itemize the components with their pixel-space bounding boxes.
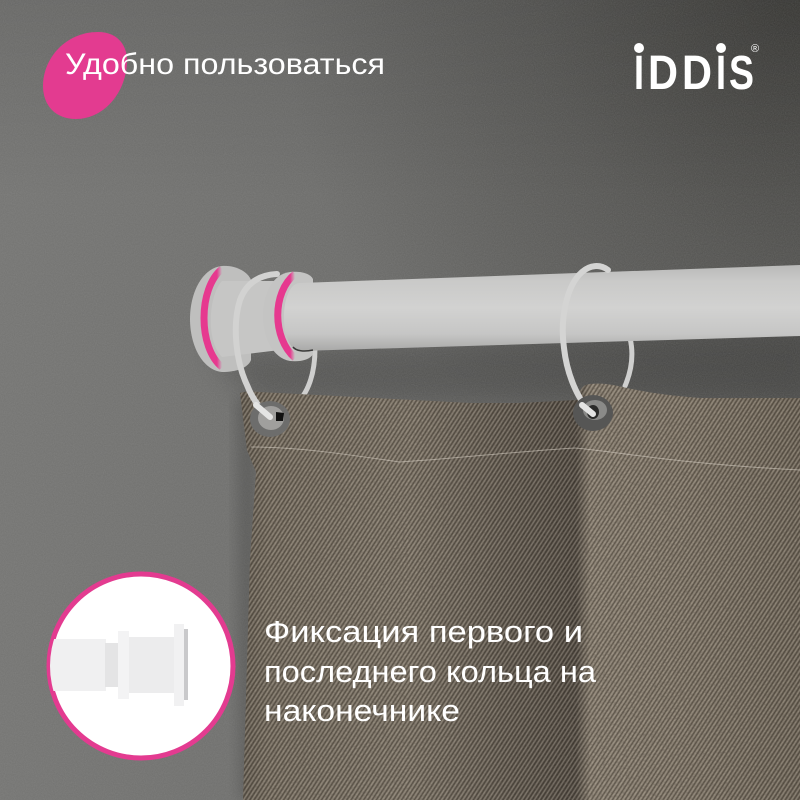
logo: D	[648, 47, 678, 100]
logo: I	[634, 47, 644, 100]
caption: последнего кольца на	[264, 654, 597, 689]
front ring 1	[236, 274, 277, 417]
collar with pink band	[263, 272, 313, 361]
logo: ®	[751, 43, 759, 55]
rod end detail	[40, 624, 188, 706]
back parts of curtain rings	[303, 338, 632, 396]
logo: S	[729, 47, 754, 100]
inset circle	[40, 574, 233, 758]
curtain	[230, 380, 800, 800]
caption	[264, 614, 597, 728]
grommet 1	[250, 401, 290, 437]
curtain shadow on wall	[236, 400, 258, 800]
logo: I	[716, 47, 726, 100]
ring 2	[563, 266, 608, 414]
caption: наконечнике	[264, 693, 460, 728]
grommet 2	[573, 395, 613, 431]
pink blob	[43, 32, 127, 119]
caption: Фиксация первого и	[264, 614, 583, 649]
stitch line	[251, 447, 800, 470]
rod	[284, 265, 800, 351]
heading: Удобно пользоваться	[65, 48, 385, 81]
logo	[634, 43, 759, 100]
end cap with pink band	[190, 266, 280, 372]
logo: D	[682, 47, 712, 100]
